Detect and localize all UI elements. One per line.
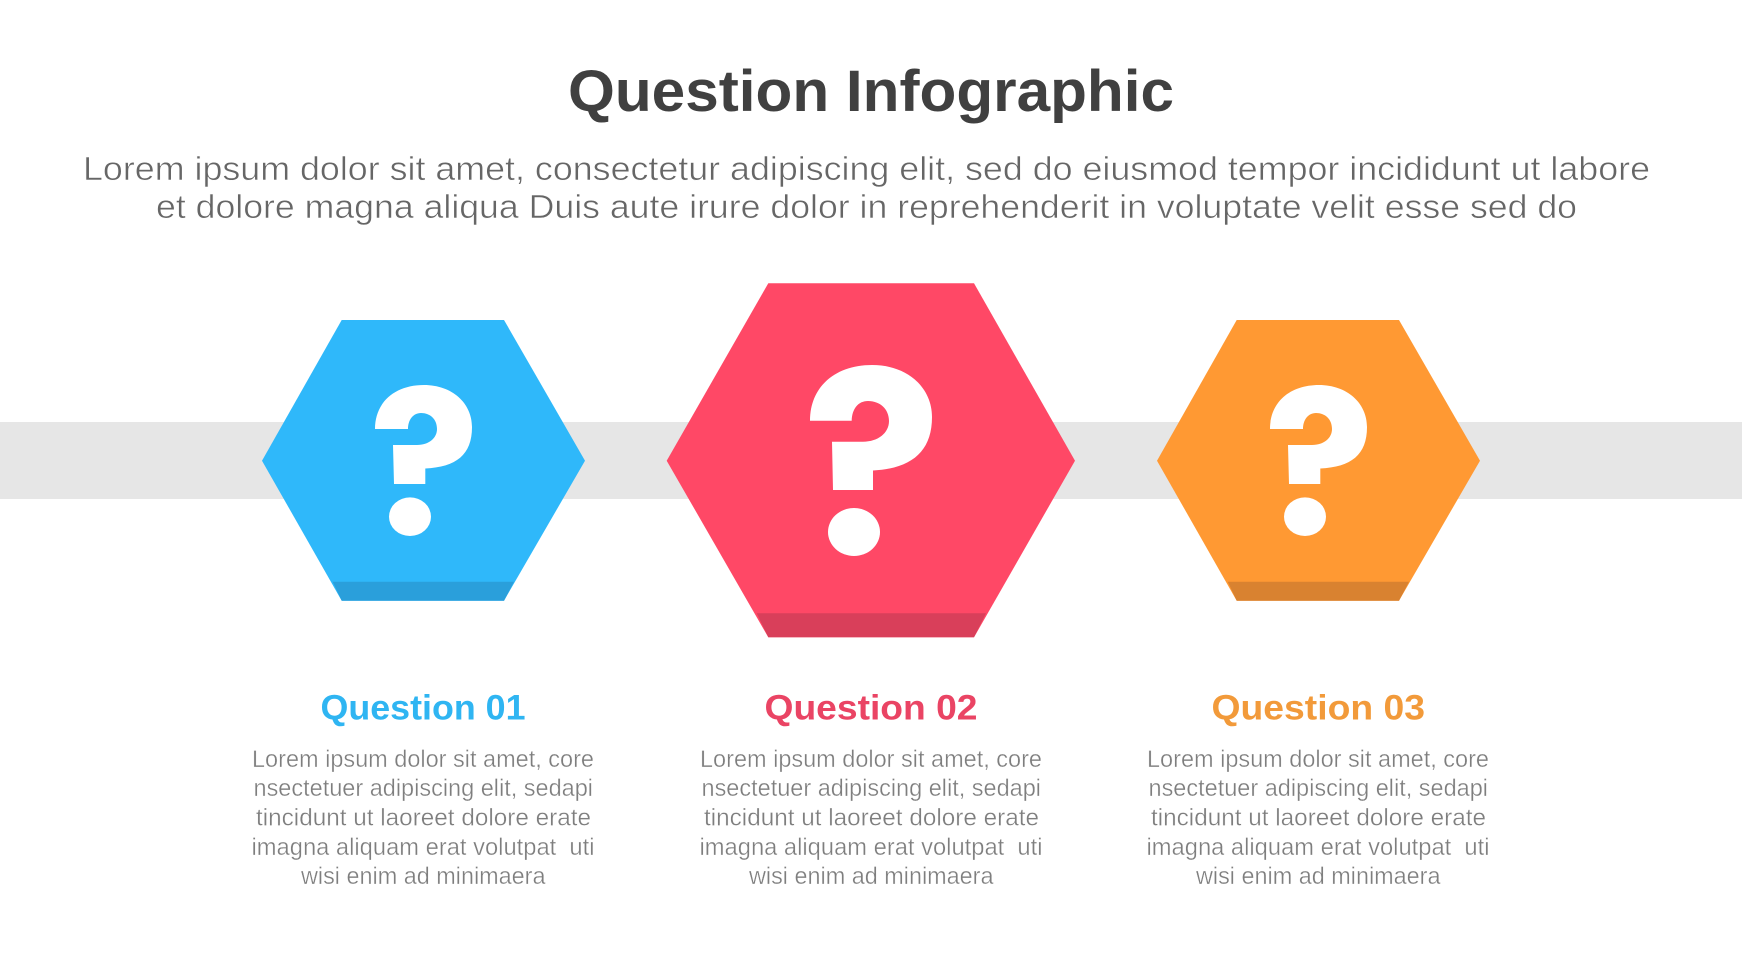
text block: question 02 description: tincidunt ut laoreet dolore erate	[704, 804, 1039, 832]
text block: question 03 description: tincidunt ut laoreet dolore erate	[1151, 804, 1486, 832]
text block: question 01 description	[252, 746, 594, 890]
panel: question 02	[700, 688, 1042, 890]
text block: question 02 description: Lorem ipsum dolor sit amet, core	[700, 746, 1042, 773]
text block: question 01 description: Lorem ipsum dolor sit amet, core	[252, 746, 594, 773]
text block: question 02 description: wisi enim ad minimaera	[748, 863, 994, 890]
text block: question 01 description: imagna aliquam erat volutpat uti	[252, 834, 594, 861]
subtitle text block: Lorem ipsum dolor sit amet, consectetur adipiscing elit, sed do eiusmod tempor incididunt ut labore	[83, 150, 1650, 187]
heading: question 03: Question 03	[1212, 688, 1425, 728]
text block: question 02 description: nsectetuer adipiscing elit, sedapi	[702, 775, 1041, 802]
icon: red hexagon with question mark	[667, 283, 1075, 637]
panel: question 03	[1146, 688, 1490, 890]
text block: question 03 description: nsectetuer adipiscing elit, sedapi	[1148, 775, 1488, 802]
text block: question 02 description	[700, 746, 1042, 890]
horizontal grey band	[0, 422, 1742, 499]
text block: question 03 description: imagna aliquam erat volutpat uti	[1146, 834, 1490, 861]
panel: question 01	[252, 688, 594, 890]
text block: question 02 description: imagna aliquam erat volutpat uti	[700, 834, 1042, 861]
text block: question 01 description: tincidunt ut laoreet dolore erate	[256, 804, 591, 832]
text block: question 03 description: wisi enim ad minimaera	[1195, 863, 1441, 890]
heading: question 02: Question 02	[764, 688, 978, 728]
icon: orange hexagon with question mark	[1157, 320, 1480, 601]
icon: blue hexagon with question mark	[262, 320, 585, 601]
heading: question 01: Question 01	[320, 688, 526, 728]
text block: question 01 description: nsectetuer adipiscing elit, sedapi	[254, 775, 593, 802]
subtitle text block: et dolore magna aliqua Duis aute irure dolor in reprehenderit in voluptate velit esse sed do	[156, 188, 1577, 225]
text block: question 03 description	[1146, 746, 1490, 890]
text block: question 01 description: wisi enim ad minimaera	[300, 863, 546, 890]
subtitle text block	[83, 150, 1650, 225]
title: Question Infographic	[568, 59, 1174, 124]
text block: question 03 description: Lorem ipsum dolor sit amet, core	[1147, 746, 1489, 773]
